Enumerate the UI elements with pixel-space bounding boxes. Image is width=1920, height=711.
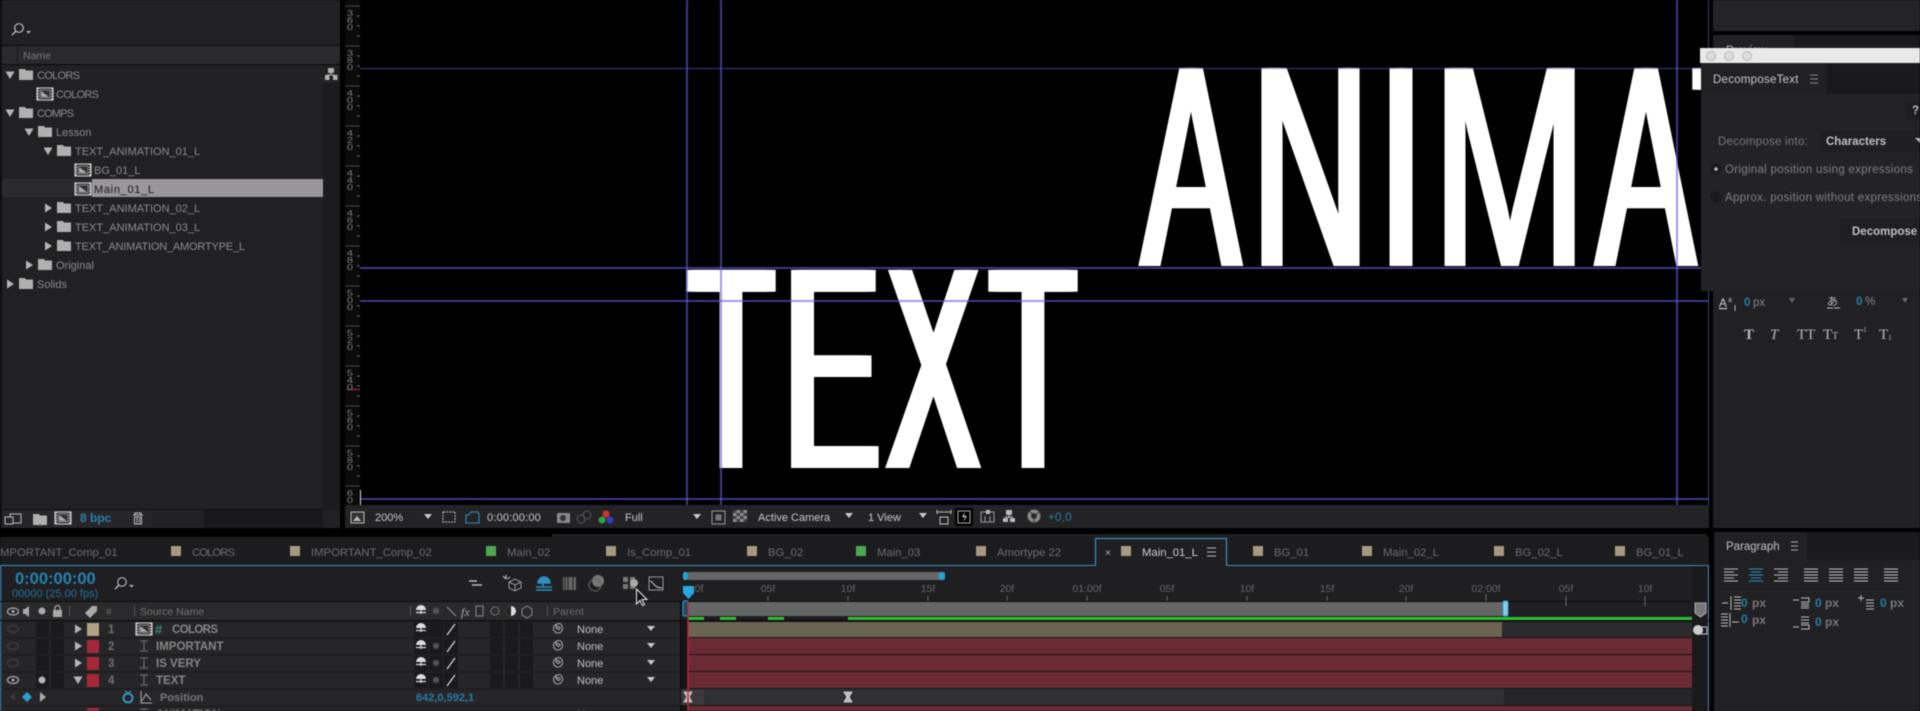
viewer word: TEXT	[686, 208, 1078, 530]
decompose into dropdown: Characters	[1826, 136, 1886, 148]
viewer ruler: 0	[347, 96, 354, 106]
project tree: Solids	[37, 279, 67, 291]
timeline tab strip: ×	[1105, 548, 1111, 559]
timeline tab strip: COLORS	[192, 547, 235, 559]
viewer word: ANIMAT: A	[1597, 6, 1695, 328]
project tree: Main_01_L	[94, 184, 154, 196]
viewer ruler: 0	[347, 263, 354, 273]
project tree: TEXT_ANIMATION_AMORTYPE_L	[75, 241, 245, 253]
layer 1: COLORS	[75, 622, 655, 637]
time ruler	[0, 566, 1708, 711]
viewer ruler: 3	[347, 9, 354, 19]
viewer word: TEXT: E	[784, 208, 880, 530]
paragraph tab label: Paragraph	[1726, 541, 1780, 553]
viewer ruler: 5	[347, 289, 354, 299]
viewer toolbar: +0,0	[1048, 512, 1072, 524]
character panel settings: %	[1865, 296, 1875, 308]
project footer toolbar	[0, 509, 323, 528]
layer 2: IMPORTANT: 2	[108, 641, 114, 653]
viewer word: ANIMAT: M	[1432, 6, 1587, 328]
indent settings: 0	[1815, 596, 1822, 610]
viewer ruler: 0	[347, 183, 354, 193]
character panel settings: 0	[1744, 297, 1750, 309]
project column header: Name	[23, 50, 51, 62]
time ruler: 10f	[1638, 583, 1652, 595]
playhead	[683, 586, 694, 711]
viewer ruler: 0	[347, 303, 354, 313]
property row: Position: 642,0,592,1	[416, 692, 474, 704]
window title bar	[1700, 48, 1920, 63]
viewer toolbar: 1 View	[868, 512, 901, 524]
viewer ruler: 4	[347, 89, 354, 99]
timeline column headers: Parent	[553, 606, 584, 618]
indent settings: px	[1752, 596, 1766, 610]
time ruler: 10f	[841, 583, 855, 595]
layer 3: IS VERY: None	[577, 658, 603, 670]
window: DecomposeText	[1700, 48, 1920, 291]
project tree: BG_01_L	[94, 165, 140, 177]
time ruler: 20f	[1399, 583, 1413, 595]
indent settings	[1721, 595, 1904, 629]
timeline tab strip: Main_01_L	[1142, 547, 1198, 559]
viewer ruler: 0	[347, 223, 354, 233]
indent settings: px	[1825, 615, 1839, 629]
layer 4: TEXT: None	[577, 675, 603, 687]
project tree: COMPS	[37, 108, 74, 120]
project tree: Original	[56, 260, 94, 272]
viewer ruler: 6	[347, 489, 354, 499]
layer 1: COLORS: COLORS	[172, 624, 218, 636]
time ruler: 0f	[695, 583, 703, 595]
active tab: Main_01_L	[1095, 538, 1226, 568]
viewer toolbar: 0:00:00:00	[487, 512, 541, 524]
timeline tab strip: Main_03	[877, 547, 920, 559]
viewer toolbar	[345, 505, 1709, 528]
layer 2: IMPORTANT	[75, 640, 655, 653]
work area bar	[683, 601, 1508, 616]
layer eyes	[8, 626, 18, 684]
project tree	[6, 69, 245, 291]
viewer ruler: 0	[347, 103, 354, 113]
indent settings: 0	[1815, 615, 1822, 629]
keyframes	[684, 692, 852, 702]
timeline tab strip: Main_02	[507, 547, 550, 559]
indent settings: px	[1825, 596, 1839, 610]
project footer toolbar: 8 bpc	[80, 511, 112, 525]
decompose into dropdown: Decompose into:	[1718, 136, 1808, 148]
character panel settings: A	[1719, 296, 1727, 310]
viewer ruler: 5	[347, 329, 354, 339]
time ruler: 05f	[761, 583, 775, 595]
viewer toolbar: 200%	[375, 512, 403, 524]
timeline tab strip: IMPORTANT_Comp_02	[311, 547, 432, 559]
timeline column headers: Source Name	[140, 606, 204, 618]
timeline tab strip: Is_Comp_01	[627, 547, 691, 559]
viewer guides	[359, 0, 1710, 506]
character panel settings	[1719, 295, 1908, 311]
viewer ruler: 6	[347, 216, 354, 226]
viewer ruler: 4	[347, 209, 354, 219]
layer 5: ANIMATION	[87, 708, 603, 711]
viewer ruler: 4	[347, 176, 354, 186]
project row highlight	[2, 179, 323, 197]
timeline tab strip: BG_01_L	[1636, 547, 1684, 559]
layer 4: TEXT: 4	[108, 675, 115, 687]
panel: project	[0, 0, 345, 528]
timeline tab strip: Amortype 22	[997, 547, 1061, 559]
text style buttons: TT	[1797, 327, 1815, 343]
viewer ruler: 6	[347, 16, 354, 26]
current time display: 0:00:00:00	[15, 570, 96, 588]
character panel settings: a	[1728, 297, 1732, 304]
text style buttons: T	[1879, 327, 1888, 343]
viewer ruler: 4	[347, 129, 354, 139]
viewer toolbar: Active Camera	[758, 512, 831, 524]
tab: DecomposeText	[1701, 64, 1826, 94]
text style buttons: T	[1854, 327, 1863, 343]
viewer word: TEXT: T	[688, 208, 774, 530]
viewer ruler: 0	[347, 63, 354, 73]
help button: ?	[1912, 105, 1919, 117]
time ruler: 01:00f	[1072, 583, 1102, 595]
timeline layer bars	[681, 621, 1692, 711]
viewer ruler: 4	[347, 249, 354, 259]
project tree: TEXT_ANIMATION_02_L	[75, 203, 200, 215]
viewer word: TEXT: X	[887, 208, 980, 530]
viewer ruler: 5	[347, 409, 354, 419]
viewer ruler: 0	[347, 463, 354, 473]
project tree: TEXT_ANIMATION_01_L	[75, 146, 200, 158]
project tree: Lesson	[56, 127, 91, 139]
viewer word: ANIMAT: I	[1381, 6, 1421, 328]
text style buttons	[1744, 326, 1892, 343]
time ruler: 02:00f	[1471, 583, 1501, 595]
timeline tab strip: MPORTANT_Comp_01	[0, 547, 118, 559]
text style buttons: 1	[1863, 326, 1867, 334]
tab: DecomposeText: DecomposeText	[1713, 74, 1799, 86]
character panel settings: px	[1753, 297, 1765, 309]
alignment buttons	[1724, 569, 1898, 581]
viewer ruler: 4	[347, 376, 354, 386]
layer 4: TEXT	[74, 674, 655, 687]
property row: Position: Position	[160, 692, 204, 704]
text style buttons: TT	[1823, 327, 1838, 343]
button: Decompose: Decompose	[1852, 226, 1917, 238]
timeline search icon	[115, 578, 134, 589]
time ruler: 15f	[1320, 583, 1334, 595]
time ruler: 20f	[1000, 583, 1014, 595]
current time display: 00000 (25.00 fps)	[12, 588, 98, 600]
layer 3: IS VERY: IS VERY	[156, 658, 201, 670]
timeline column headers: fx	[461, 605, 470, 619]
character panel settings: あ	[1827, 295, 1838, 308]
timeline tab strip: Main_02_L	[1383, 547, 1439, 559]
timeline tab strip: BG_02_L	[1515, 547, 1563, 559]
viewer ruler: 6	[347, 416, 354, 426]
viewer ruler: 4	[347, 169, 354, 179]
layer 1: COLORS: #	[155, 622, 163, 637]
time ruler: 05f	[1559, 583, 1573, 595]
layer 3: IS VERY: 3	[108, 658, 114, 670]
timeline tab strip: BG_01	[1274, 547, 1309, 559]
viewer ruler: 8	[347, 456, 354, 466]
indent settings: 0	[1880, 596, 1887, 610]
panel: paragraph	[1709, 528, 1920, 711]
panel: top right: Preview	[1726, 45, 1768, 57]
indent settings: px	[1752, 613, 1766, 627]
layer 3: IS VERY	[75, 657, 655, 670]
help button	[1905, 102, 1920, 120]
layer 2: IMPORTANT: None	[577, 641, 603, 653]
property row: Position	[10, 691, 474, 704]
decompose into dropdown	[1718, 131, 1920, 152]
panel: timeline	[0, 566, 1709, 711]
timeline column headers: #	[106, 607, 112, 618]
indent settings: 0	[1741, 596, 1748, 610]
radio: approximate position: Approx. position without expressions	[1725, 192, 1920, 204]
viewer ruler: 3	[347, 49, 354, 59]
time ruler: 15f	[921, 583, 935, 595]
project search icon	[12, 24, 31, 35]
text style buttons: T	[1770, 327, 1780, 343]
project tree: COLORS	[56, 89, 99, 101]
text style buttons: 1	[1888, 334, 1892, 342]
time ruler: 05f	[1160, 583, 1174, 595]
viewer ruler: 8	[347, 256, 354, 266]
timeline tab strip	[0, 528, 1709, 568]
viewer toolbar: Full	[625, 512, 643, 524]
time ruler: 10f	[1240, 583, 1254, 595]
indent settings: px	[1890, 596, 1904, 610]
viewer ruler: 0	[347, 423, 354, 433]
cursor	[636, 589, 647, 606]
project tree: COLORS	[37, 70, 80, 82]
timeline toolbar icons	[469, 575, 663, 591]
viewer ruler: 0	[347, 496, 354, 506]
project tree: TEXT_ANIMATION_03_L	[75, 222, 200, 234]
viewer ruler: 0	[347, 296, 354, 306]
indent settings: 0	[1741, 612, 1748, 626]
viewer ruler: 0	[347, 143, 354, 153]
radio: original position: Original position using expressions	[1725, 164, 1913, 176]
viewer word: ANIMAT	[1138, 6, 1780, 328]
viewer ruler: 5	[347, 369, 354, 379]
cache indicator: green segments	[688, 617, 1692, 620]
viewer ruler: 5	[347, 449, 354, 459]
viewer ruler: 0	[347, 343, 354, 353]
viewer ruler: 2	[347, 136, 353, 146]
viewer ruler	[345, 0, 361, 506]
layer 2: IMPORTANT: IMPORTANT	[156, 641, 224, 653]
viewer ruler: 2	[347, 336, 353, 346]
comp marker icons	[1693, 603, 1707, 635]
viewer ruler: 8	[347, 56, 354, 66]
layer 1: COLORS: None	[577, 624, 603, 636]
timeline column headers	[1, 602, 680, 620]
viewer word: ANIMAT: T	[1694, 6, 1780, 328]
project column header	[2, 46, 340, 64]
character panel settings: 0	[1856, 296, 1862, 308]
timeline tab strip: BG_02	[768, 547, 803, 559]
timeline layer list	[1, 622, 680, 711]
panel: top right	[1709, 0, 1920, 528]
viewer word: ANIMAT: A	[1142, 6, 1240, 328]
current time display	[12, 570, 98, 600]
button: Decompose	[1840, 218, 1920, 244]
viewer word: ANIMAT: N	[1252, 6, 1369, 328]
composition viewer	[360, 0, 1709, 505]
layer 1: COLORS: 1	[108, 624, 115, 636]
icon: flowchart	[325, 68, 338, 80]
layer 4: TEXT: TEXT	[156, 675, 185, 687]
viewer ruler: 0	[347, 23, 354, 33]
viewer word: TEXT: T	[990, 208, 1076, 530]
viewer ruler: 0	[347, 383, 354, 393]
text style buttons: T	[1744, 327, 1754, 343]
